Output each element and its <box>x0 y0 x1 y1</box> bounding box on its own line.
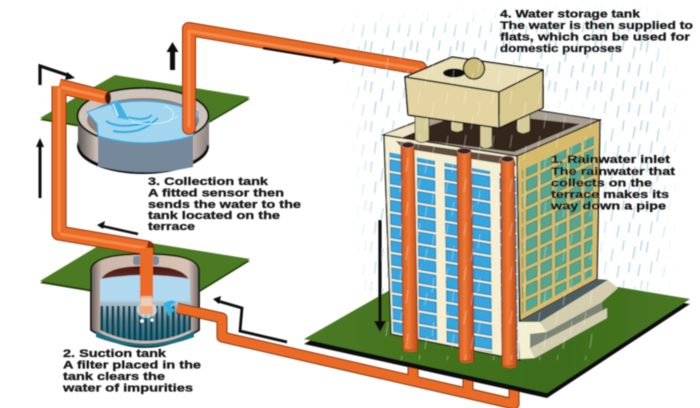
pipe: outline of pipes behind tanks <box>59 86 147 316</box>
roof <box>383 100 600 156</box>
legs supporting storage tank <box>415 108 530 148</box>
pipe: underground feed to suction tank <box>177 308 514 404</box>
water surface <box>87 101 198 143</box>
water swirl <box>106 115 158 132</box>
text: suction tank <box>62 348 201 394</box>
arrow: toward suction tank <box>213 296 287 342</box>
arrow: along pipe to left <box>97 221 138 234</box>
icon: water storage tank <box>405 57 543 128</box>
rain <box>345 6 676 296</box>
tank interior below water <box>98 135 193 172</box>
text: rainwater inlet <box>550 154 675 212</box>
pipe: downpipes on building <box>401 142 517 368</box>
panel: building platform <box>304 287 690 398</box>
text: collection tank: terrace <box>148 221 195 233</box>
text: suction tank: water of impurities <box>62 382 193 394</box>
text: collection tank <box>148 176 301 233</box>
pipe: collection tank to storage tank <box>189 29 420 128</box>
text: water storage tank: The water is then supplied to <box>500 20 693 32</box>
text: suction tank: tank clears the <box>63 371 165 383</box>
text: rainwater inlet: collects on the <box>551 178 652 190</box>
text: suction tank: A filter placed in the <box>63 360 201 372</box>
text: rainwater inlet: The rainwater that <box>551 166 675 178</box>
text: water storage tank <box>500 8 693 55</box>
icon: suction tank <box>91 254 199 348</box>
arrow: up beside collection tank outlet <box>166 42 178 70</box>
pipe: inner drop pipe in suction tank <box>140 248 153 314</box>
building <box>383 100 618 360</box>
text: rainwater inlet: way down a pipe <box>550 200 666 212</box>
valve <box>133 256 159 265</box>
podium <box>520 279 608 322</box>
rain streaks over building <box>384 58 600 360</box>
text: collection tank: tank located on the <box>148 210 280 222</box>
arrow: down beside building <box>374 220 386 332</box>
panel: suction tank platform <box>40 237 250 306</box>
arrow: along top pipe toward storage tank <box>263 48 342 64</box>
arrow: up left rising pipe <box>36 138 44 198</box>
pipe: suction tank to collection tank <box>59 86 147 248</box>
text: collection tank: 3. Collection tank <box>148 176 269 188</box>
text: water storage tank: 4. Water storage tank <box>500 8 641 20</box>
text: collection tank: A fitted sensor then <box>148 188 284 200</box>
text: suction tank: 2. Suction tank <box>63 348 167 360</box>
text: rainwater inlet: terrace makes its <box>551 189 669 201</box>
text: rainwater inlet: 1. Rainwater inlet <box>551 154 670 166</box>
text: water storage tank: domestic purposes <box>500 43 622 55</box>
front face <box>384 135 520 360</box>
text: collection tank: sends the water to the <box>148 199 301 211</box>
arrow: into collection tank <box>40 66 75 85</box>
side face <box>517 120 600 321</box>
splash <box>137 302 157 318</box>
text: water storage tank: flats, which can be used for <box>500 32 691 44</box>
panel: collection tank platform <box>40 75 250 143</box>
icon: collection tank <box>77 88 209 174</box>
